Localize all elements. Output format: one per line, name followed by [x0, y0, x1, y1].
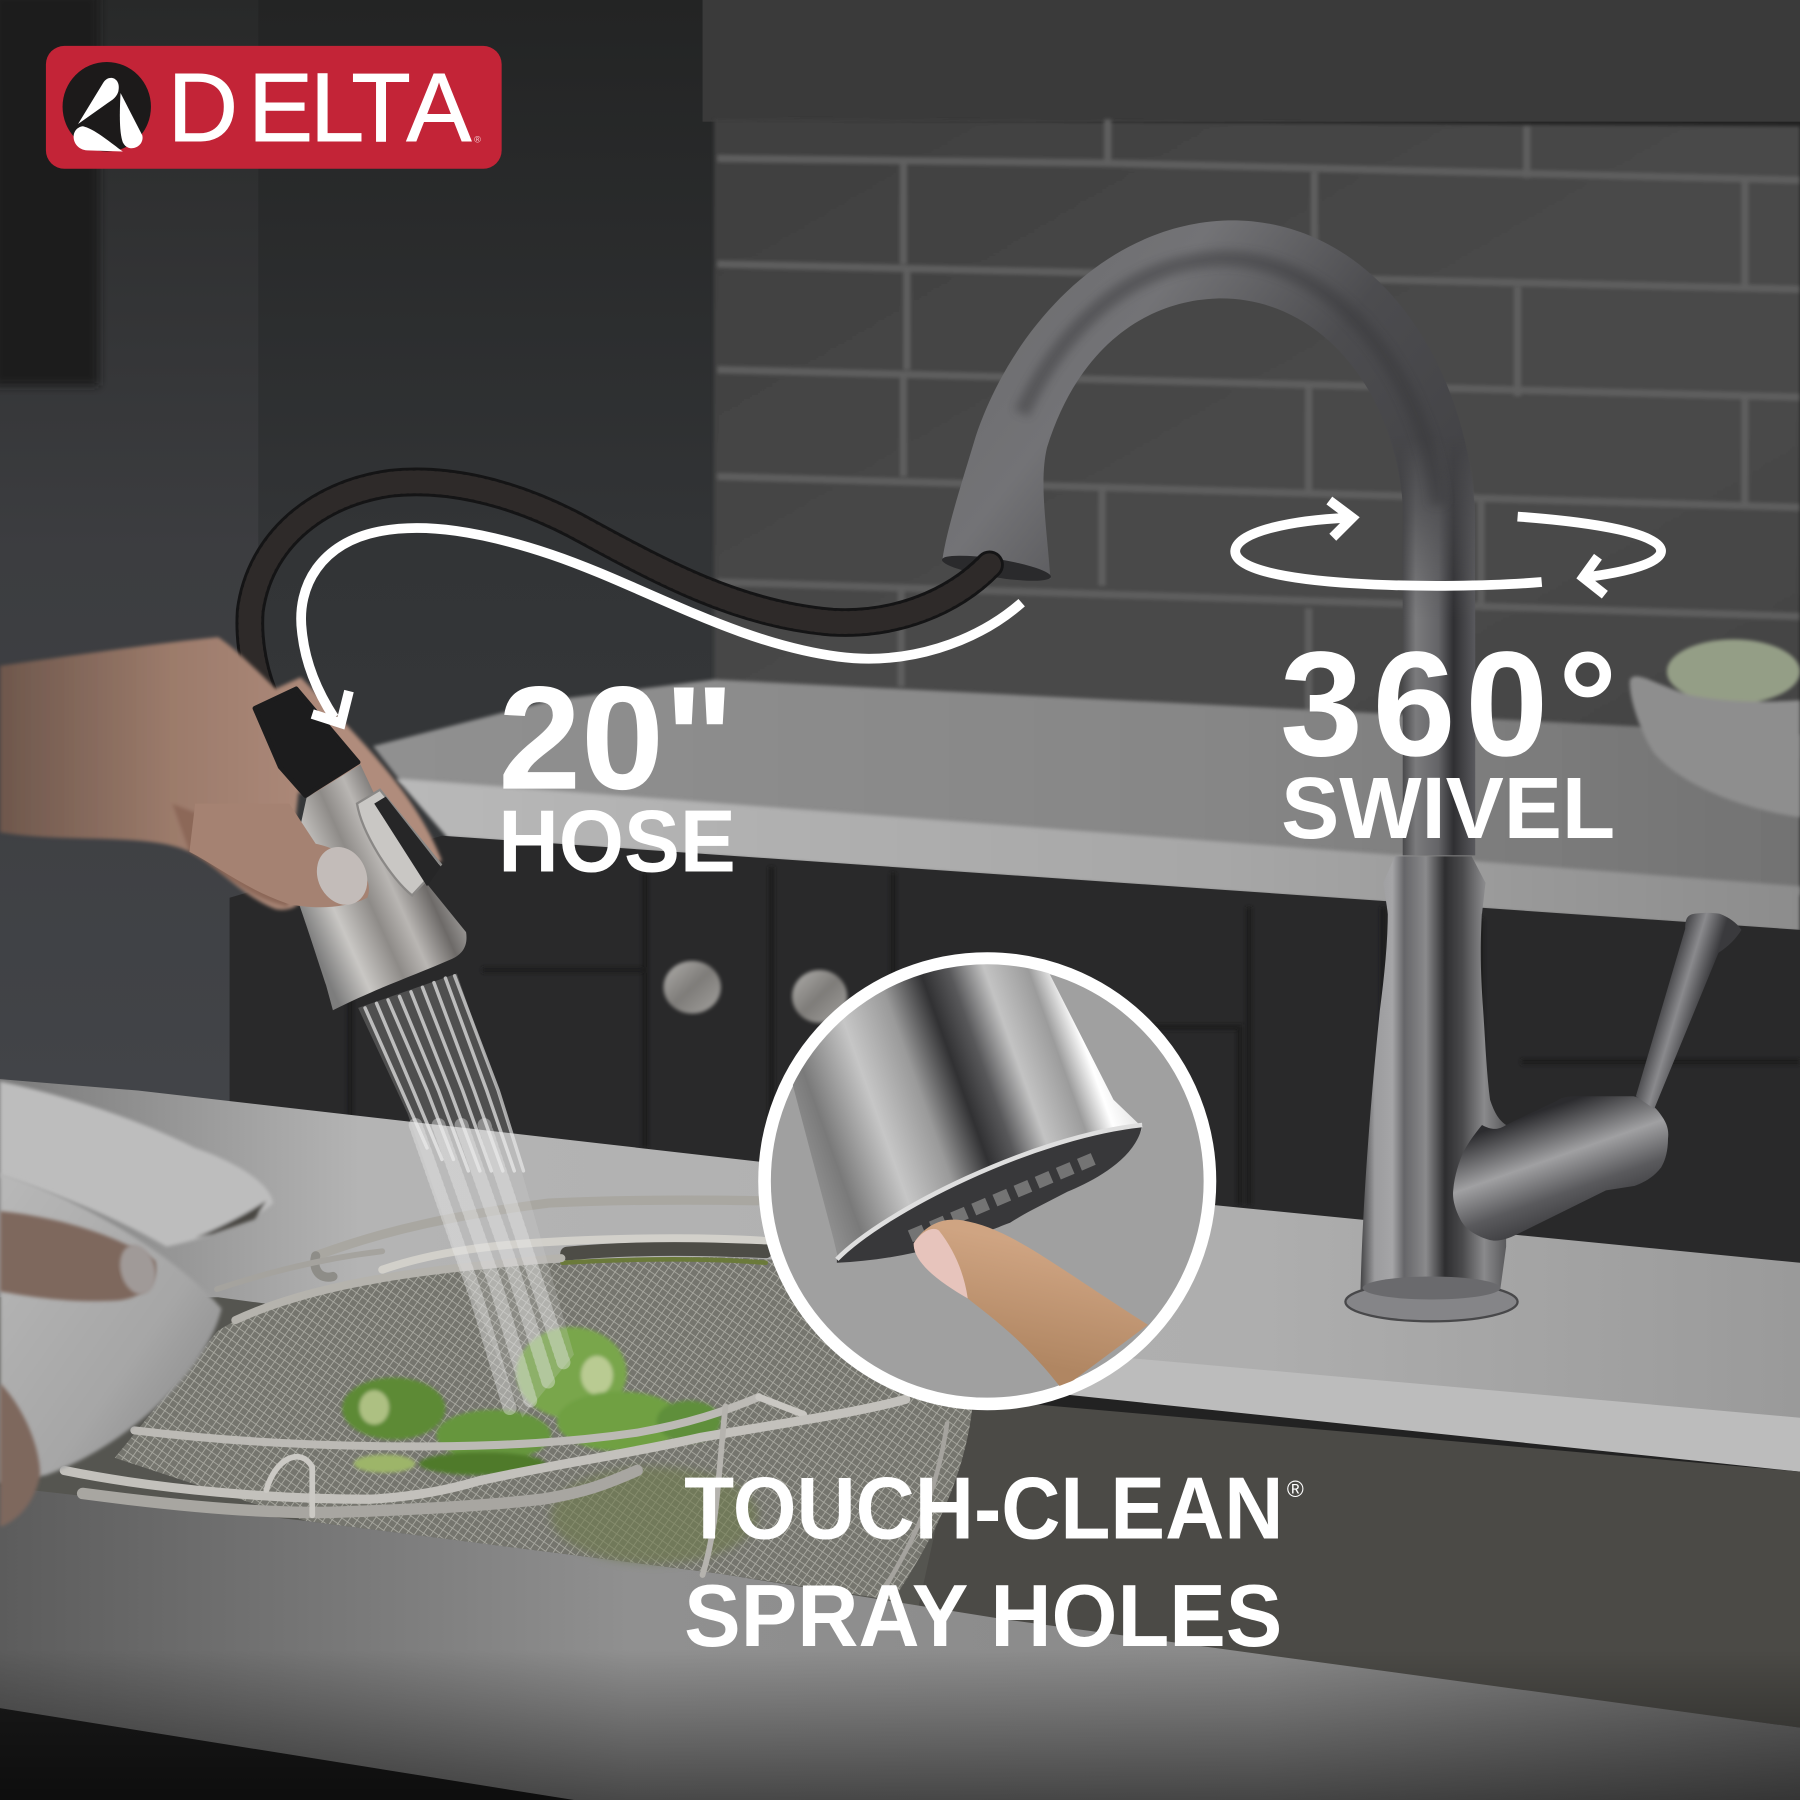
spray head close-up	[792, 953, 1142, 1263]
cabinet knob right	[792, 970, 847, 1023]
stainless sprayer body	[289, 765, 467, 1010]
green reflection under basket	[551, 1467, 758, 1564]
picture frame on wall	[0, 0, 99, 386]
spout neck shading	[1402, 466, 1475, 856]
rubber nozzles	[910, 1157, 1097, 1236]
touch-clean spray holes label: SPRAY HOLES	[684, 1566, 1282, 1665]
fingernail	[914, 1229, 968, 1298]
cabinet door frames	[350, 867, 1800, 1240]
counter front edge	[1068, 1355, 1800, 1472]
finger	[914, 1220, 1148, 1389]
escutcheon plate	[1345, 1282, 1518, 1321]
faucet collar	[1383, 856, 1485, 914]
inset: touch-clean spray holes	[765, 953, 1210, 1404]
colander mesh basket	[115, 1257, 972, 1600]
360 degree swivel label: SWIVEL	[1281, 760, 1615, 857]
water spray stream	[358, 973, 574, 1418]
counter bowl with vegetables	[1630, 639, 1800, 817]
20 inch hose label: HOSE	[498, 791, 736, 890]
back countertop edge	[396, 778, 1800, 932]
spout sheen	[1022, 258, 1438, 505]
pull-down hose	[250, 482, 990, 706]
white bowl	[0, 1173, 222, 1483]
palm shadow	[172, 804, 316, 907]
faucet spout	[942, 220, 1475, 855]
handle cylinder	[1453, 1096, 1668, 1241]
lever handle	[1636, 913, 1741, 1109]
thumb over sprayer	[189, 804, 369, 907]
colander rims	[64, 1200, 947, 1590]
touch-clean spray holes label	[684, 1458, 1304, 1665]
faucet	[941, 220, 1741, 1321]
subway tile wall	[714, 119, 1800, 758]
inset circle	[765, 959, 1210, 1404]
left wall	[0, 0, 259, 1102]
bowl and second hand	[0, 1173, 222, 1527]
dark floor strip	[0, 1708, 574, 1800]
360 degree swivel label: 360°	[1280, 620, 1617, 787]
Delta logo: ®	[474, 134, 481, 144]
near counter top	[0, 1487, 1800, 1800]
sprayer head	[189, 689, 467, 1010]
fingernail	[115, 1241, 161, 1298]
touch-clean spray holes label: ®	[1287, 1476, 1304, 1502]
towel on counter	[0, 1081, 273, 1247]
hose arrow	[301, 528, 1022, 723]
base cabinets	[230, 836, 1800, 1263]
logo wordmark: DELTA	[168, 53, 471, 162]
logo emblem	[63, 62, 151, 152]
middle wall	[258, 0, 717, 895]
bottom vignette	[0, 1263, 1800, 1800]
front counter surface	[0, 1079, 1800, 1469]
hand holding sprayer	[0, 637, 442, 910]
upper cabinet soffit	[703, 0, 1800, 122]
spray face	[837, 1125, 1142, 1263]
Delta logo	[46, 46, 502, 169]
thumbnail	[308, 839, 377, 913]
left hand fingers	[0, 1211, 156, 1527]
swivel arrows	[1235, 501, 1661, 595]
hand and fingers	[0, 637, 442, 910]
chrome lip	[837, 1125, 1142, 1259]
black hose connector	[255, 689, 358, 796]
20 inch hose label: 20"	[498, 657, 735, 821]
colander with brussels sprouts	[64, 1200, 972, 1600]
spray mode button	[357, 790, 441, 895]
back countertop surface	[373, 680, 1800, 895]
touch-clean spray holes label: TOUCH-CLEAN	[684, 1458, 1283, 1557]
brussels sprouts	[342, 1327, 721, 1475]
cabinet knob left	[664, 961, 721, 1014]
logo red badge	[46, 46, 502, 169]
sink interior	[895, 1398, 1800, 1728]
faucet base body	[1360, 910, 1506, 1297]
20 inch hose label	[498, 657, 736, 890]
spout nozzle opening	[941, 551, 1052, 586]
